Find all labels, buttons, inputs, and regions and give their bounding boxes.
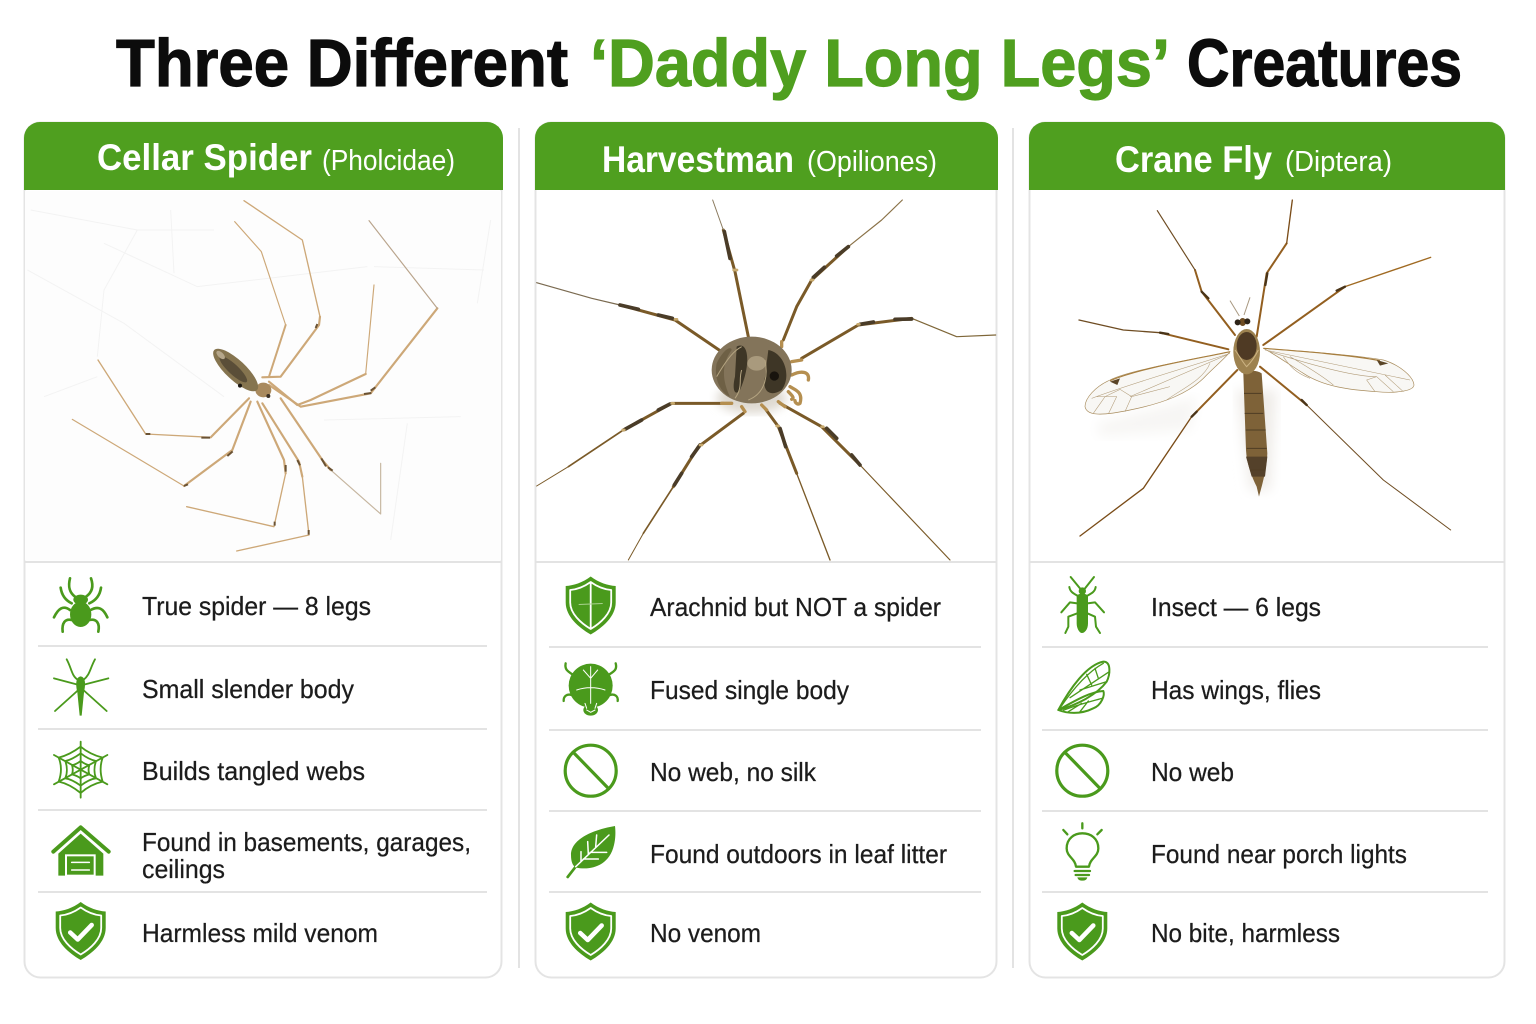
panel: cellar spider [24, 122, 503, 978]
text: found in basements: Found in basements, garages, [142, 827, 471, 857]
icon: no symbol [565, 745, 616, 796]
photo: cellar spider [25, 191, 501, 560]
text: no venom: No venom [650, 918, 761, 948]
icon: shield split [566, 576, 616, 634]
icon: harvestman body [564, 663, 618, 716]
icon: garage [53, 827, 109, 876]
text: true spider: True spider — 8 legs [142, 591, 371, 621]
icon: wing [1058, 662, 1109, 713]
spider legs [72, 201, 437, 551]
header: cellar spider [24, 122, 503, 190]
icon: leaf [568, 826, 615, 877]
title: Three Different [116, 26, 568, 101]
header: harvestman: (Opiliones) [807, 146, 937, 178]
icon: slender spider [54, 659, 108, 716]
text: porch lights: Found near porch lights [1151, 839, 1407, 869]
icon: shield check [1057, 902, 1107, 960]
title [116, 26, 1462, 101]
icon: insect [1061, 577, 1104, 633]
photo: harvestman [537, 200, 996, 560]
title: Creatures [1187, 26, 1462, 101]
photo: crane fly [1079, 200, 1451, 536]
harvestman legs [537, 200, 996, 560]
header: harvestman [535, 122, 998, 190]
text: insect: Insect — 6 legs [1151, 592, 1321, 622]
text: slender body: Small slender body [142, 674, 354, 704]
header: cellar spider: (Pholcidae) [322, 145, 455, 177]
harvestman palps [722, 342, 809, 412]
icon: shield check [566, 902, 616, 960]
text: wings: Has wings, flies [1151, 675, 1321, 705]
text: fused body: Fused single body [650, 675, 849, 705]
header: crane fly: (Diptera) [1285, 146, 1392, 178]
icon: light bulb [1063, 823, 1102, 881]
icon: web [54, 742, 107, 798]
panel: harvestman [535, 122, 998, 978]
text: webs: Builds tangled webs [142, 756, 365, 786]
panel: crane fly [1029, 122, 1505, 978]
crane fly body [1230, 297, 1267, 497]
title: ‘Daddy Long Legs’ [590, 26, 1170, 101]
header: harvestman: Harvestman [602, 139, 794, 180]
text: no bite: No bite, harmless [1151, 918, 1340, 948]
text: no web: No web, no silk [650, 757, 817, 787]
crane fly wings [1085, 348, 1414, 414]
harvestman body [712, 337, 792, 403]
icon: no symbol [1057, 745, 1108, 796]
text: outdoors: Found outdoors in leaf litter [650, 839, 947, 869]
crane fly legs [1079, 200, 1451, 536]
text: found in basements [142, 827, 471, 884]
header: crane fly [1029, 122, 1505, 190]
text: harmless: Harmless mild venom [142, 918, 378, 948]
header: crane fly: Crane Fly [1115, 139, 1272, 180]
text: no web: No web [1151, 757, 1234, 787]
icon: shield check [56, 902, 106, 960]
text: found in basements: ceilings [142, 854, 225, 884]
header: cellar spider: Cellar Spider [97, 137, 312, 178]
text: arachnid: Arachnid but NOT a spider [650, 592, 941, 622]
spider body [207, 343, 271, 398]
icon: spider [54, 578, 107, 632]
